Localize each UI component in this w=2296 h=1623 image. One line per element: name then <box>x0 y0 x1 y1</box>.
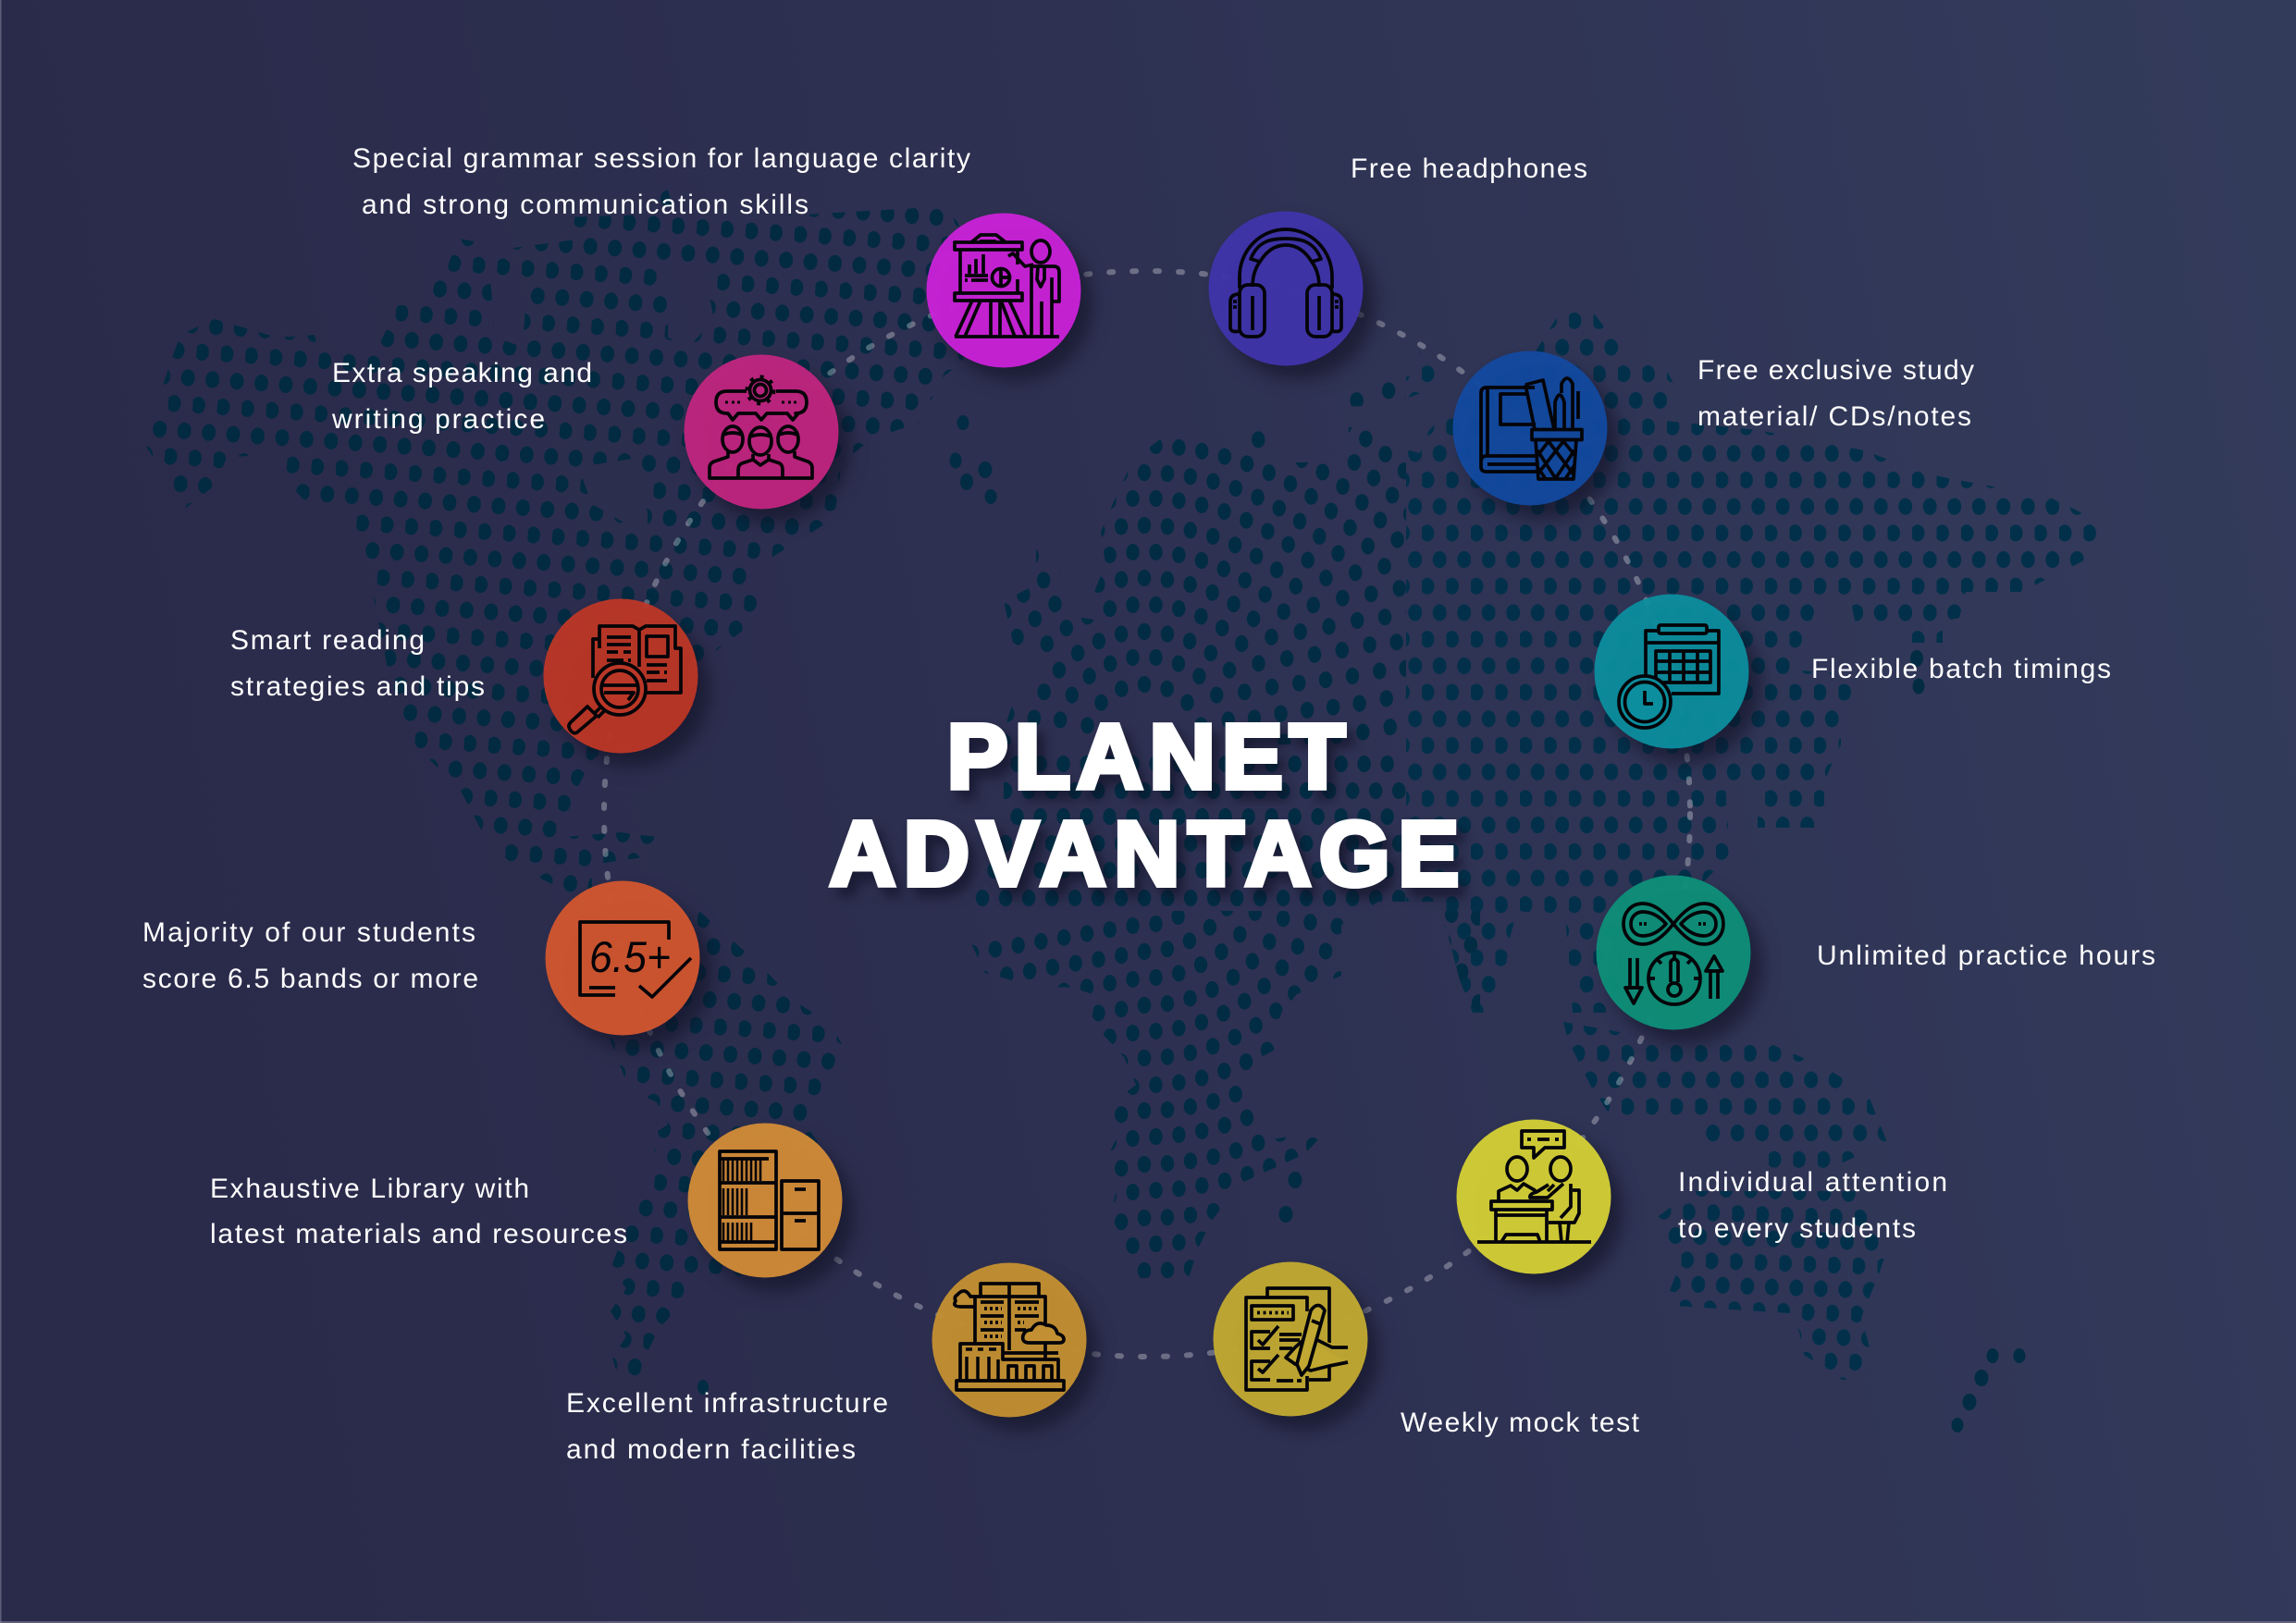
text: mock test: Weekly mock test <box>1401 1408 1640 1438</box>
icon: score sheet 6.5+ with tick <box>580 922 691 997</box>
icon: score sheet 6.5+ with tick: 6.5+ <box>589 932 671 981</box>
text: infrastructure: and modern facilities <box>566 1434 856 1465</box>
title <box>830 706 1459 904</box>
badge: smart reading <box>544 599 697 753</box>
text: infrastructure: Excellent infrastructure <box>566 1388 888 1419</box>
text: speaking and writing: Extra speaking and <box>332 358 592 388</box>
text: speaking and writing: writing practice <box>331 404 545 435</box>
text: band score: score 6.5 bands or more <box>142 964 478 994</box>
badge: library <box>688 1123 842 1278</box>
text: grammar session: Special grammar session for language clarity <box>352 143 970 174</box>
dashed ring connecting the features <box>604 271 1690 1357</box>
icon: book and pencil basket <box>1481 378 1582 479</box>
badge: band score <box>546 880 699 1036</box>
icon: buildings and trees <box>955 1284 1064 1390</box>
badge: headphones <box>1208 211 1364 366</box>
icon: infinity and gauge <box>1623 904 1723 1004</box>
text: individual attention: Individual attention <box>1678 1167 1947 1198</box>
dotted world map <box>93 166 2128 1432</box>
text: smart reading: strategies and tips <box>230 671 485 702</box>
text: smart reading <box>230 625 485 702</box>
map: europe and africa <box>971 382 1480 1278</box>
text: library <box>210 1174 627 1249</box>
map: australia <box>1658 1191 1883 1380</box>
badge: individual attention <box>1456 1119 1611 1274</box>
text: infrastructure <box>566 1388 888 1465</box>
icon: presenter at board <box>955 235 1059 337</box>
text: speaking and writing <box>331 358 592 435</box>
text: individual attention: to every students <box>1678 1213 1916 1244</box>
text: smart reading: Smart reading <box>230 625 425 656</box>
text: library: latest materials and resources <box>210 1219 627 1249</box>
map: americas <box>146 191 964 1376</box>
badge: study material <box>1452 351 1608 505</box>
text: headphones: Free headphones <box>1351 154 1587 184</box>
map: scattered island dots <box>697 415 2026 1432</box>
badge: grammar session <box>927 213 1080 368</box>
text: individual attention <box>1678 1167 1947 1244</box>
text: band score: Majority of our students <box>142 917 475 948</box>
badge: weekly mock test <box>1214 1261 1367 1417</box>
icon: headphones <box>1230 229 1341 337</box>
text: library: Exhaustive Library with <box>210 1174 529 1204</box>
title: PLANET <box>947 706 1345 807</box>
icon: bookshelf and cabinets <box>720 1151 819 1249</box>
text: grammar session <box>352 143 970 220</box>
icon: book and magnifier <box>569 626 681 733</box>
text: flexible timings: Flexible batch timings <box>1811 654 2111 684</box>
text: grammar session: and strong communication skills <box>362 190 809 220</box>
map: eurasia east <box>1406 296 2128 1036</box>
map: southeast asia <box>1563 1022 1887 1168</box>
text: unlimited practice: Unlimited practice hours <box>1817 941 2155 971</box>
badge: speaking and writing <box>685 355 838 509</box>
badge: infrastructure <box>932 1263 1086 1417</box>
text: study material <box>1697 355 1974 432</box>
badge: flexible timings <box>1595 594 1748 749</box>
text: study material: Free exclusive study <box>1697 355 1974 386</box>
text: study material: material/ CDs/notes <box>1697 401 1971 432</box>
text: band score <box>142 917 478 994</box>
title: ADVANTAGE <box>830 803 1459 904</box>
icon: two people at desk <box>1477 1131 1591 1242</box>
icon: group with speech bubbles and gear <box>710 377 812 478</box>
badge: unlimited practice <box>1597 875 1750 1030</box>
icon: test sheet and pen <box>1246 1288 1348 1390</box>
icon: calendar and clock <box>1619 625 1719 728</box>
